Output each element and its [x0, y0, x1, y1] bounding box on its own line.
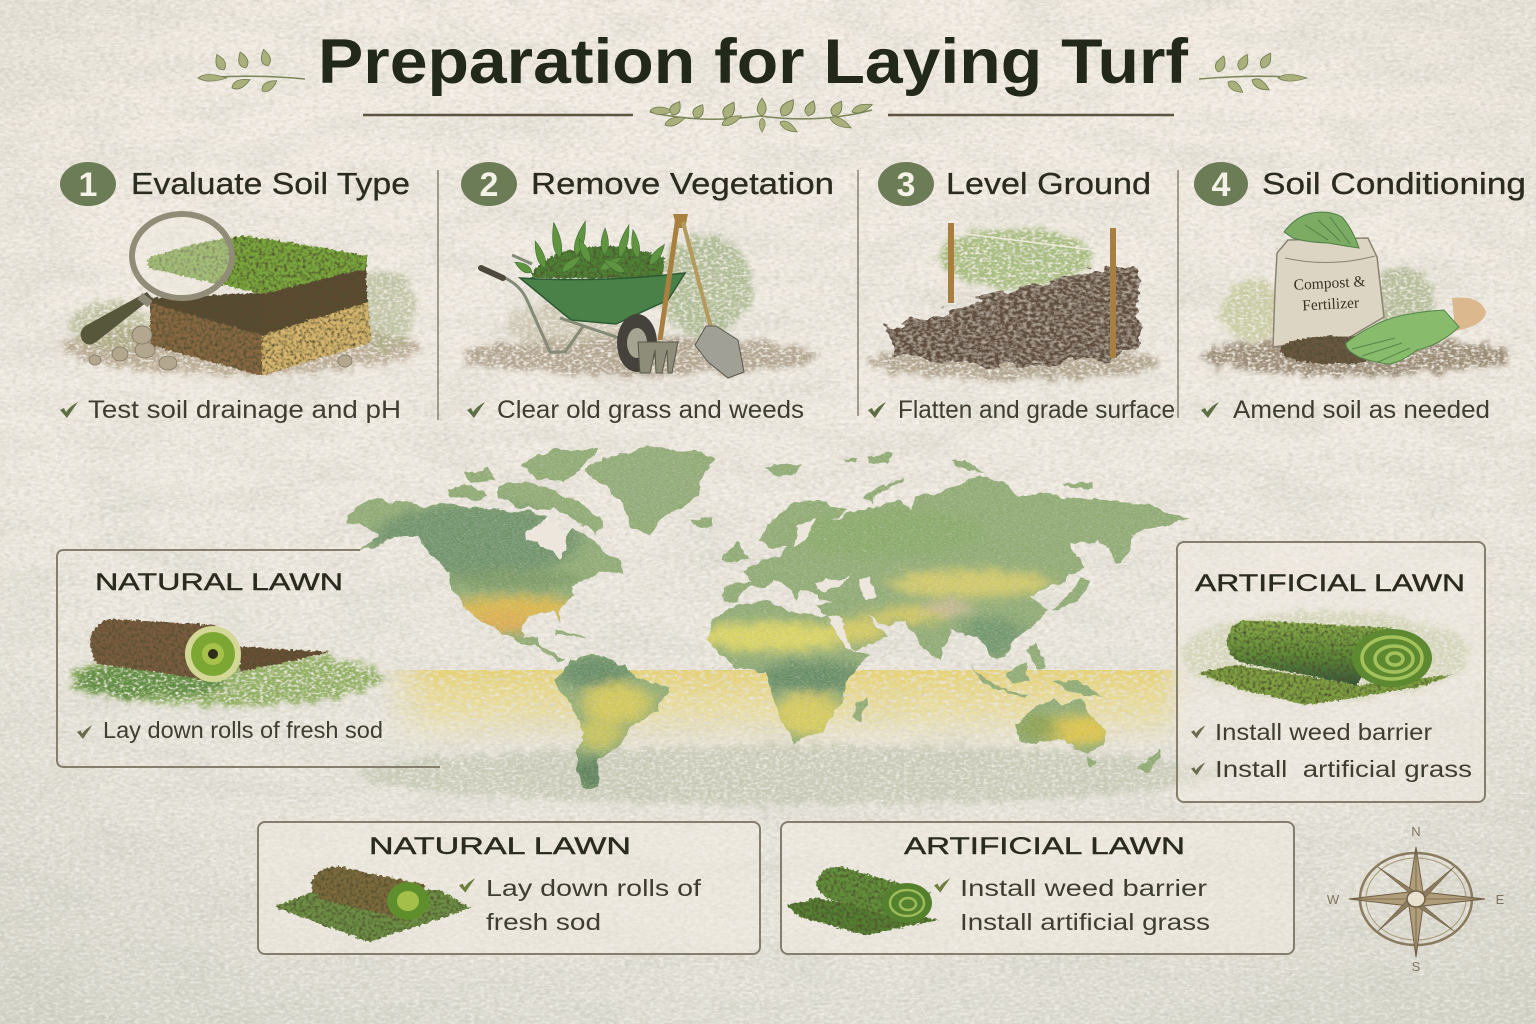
step 2 number badge: [461, 162, 517, 206]
icon: wheelbarrow with fork and spade: [460, 214, 820, 378]
bag label: [1293, 273, 1367, 315]
icon: compass rose: S: [1412, 959, 1421, 974]
step 1 number badge: [60, 162, 116, 206]
step 2 bullet: Clear old grass and weeds: [497, 396, 804, 424]
panel bullet: [459, 875, 702, 935]
step 4 number badge: 4: [1212, 166, 1231, 204]
step 3: level ground: [868, 162, 1175, 424]
panel bullets: Install weed barrier: [960, 875, 1207, 901]
pebbles: [89, 326, 352, 370]
title: [198, 27, 1307, 135]
step 2 heading: Remove Vegetation: [531, 166, 834, 201]
step 2 number badge: 2: [480, 166, 498, 204]
inland seas and bays: [526, 518, 875, 648]
icon: compass rose: [1327, 824, 1505, 974]
panel bullets: Install artificial grass: [1215, 756, 1472, 782]
icon: compost bag and gloved hands: [1200, 212, 1510, 376]
icon: soil cross-section with magnifier: [62, 214, 418, 376]
step 1: evaluate soil type: [60, 162, 418, 424]
icon: compass rose: E: [1496, 892, 1505, 907]
icon: rolled natural sod: [67, 619, 383, 706]
panel bullet: fresh sod: [486, 909, 601, 935]
bag label: Fertilizer: [1302, 294, 1360, 314]
panel bullet: Lay down rolls of: [486, 875, 702, 901]
title ornament: right sprig: [1199, 51, 1307, 95]
icon: compass rose: W: [1327, 892, 1340, 907]
step 4 number badge: [1194, 162, 1248, 206]
upper glove: [1284, 212, 1359, 248]
step 3 bullet: Flatten and grade surface: [898, 396, 1175, 424]
panel bullets: [934, 875, 1210, 935]
panel heading: NATURAL LAWN: [95, 569, 343, 596]
panel bullets: [1191, 719, 1472, 782]
title ornament: left sprig: [198, 48, 305, 94]
step dividers: [438, 170, 1178, 420]
icon: levelled soil bed with stakes and string: [870, 223, 1160, 380]
bag label: Compost &: [1293, 273, 1366, 294]
title divider with centre sprig: [363, 97, 1174, 135]
panel heading: NATURAL LAWN: [369, 833, 631, 860]
muted green haze below the map: [360, 745, 1220, 805]
step 4 heading: Soil Conditioning: [1262, 166, 1526, 201]
step 2: remove vegetation: [460, 162, 834, 424]
panel bullets: Install weed barrier: [1215, 719, 1432, 745]
step 1 heading: Evaluate Soil Type: [131, 166, 410, 201]
plants in wheelbarrow: [513, 220, 667, 278]
panel: natural lawn (bottom): [258, 822, 760, 954]
step 4: soil conditioning: [1194, 162, 1526, 424]
world map: [346, 446, 1190, 790]
icon: compass rose: N: [1411, 824, 1421, 839]
panel bullets: Install artificial grass: [960, 909, 1210, 935]
title: Preparation for Laying Turf: [318, 27, 1189, 97]
step 1 number badge: 1: [79, 166, 97, 204]
lower glove with cuff: [1452, 298, 1486, 331]
step 4 bullet: Amend soil as needed: [1233, 396, 1490, 424]
panel heading: ARTIFICIAL LAWN: [904, 833, 1185, 860]
yellow band across the ocean: [384, 670, 1185, 746]
icon: artificial turf roll: [787, 867, 939, 935]
panel heading: ARTIFICIAL LAWN: [1195, 570, 1465, 597]
step 3 heading: Level Ground: [946, 166, 1151, 201]
step 1 bullet: Test soil drainage and pH: [88, 396, 401, 424]
step 3 number badge: 3: [897, 166, 915, 204]
panel: artificial lawn (right): [1177, 542, 1485, 802]
panel bullet: Lay down rolls of fresh sod: [103, 717, 383, 743]
panel: artificial lawn (bottom): [781, 822, 1294, 954]
panel: natural lawn (left): [57, 550, 440, 767]
step 3 number badge: [878, 162, 934, 206]
icon: rolled artificial turf: [1180, 610, 1470, 705]
icon: sod roll on grass: [275, 867, 471, 942]
